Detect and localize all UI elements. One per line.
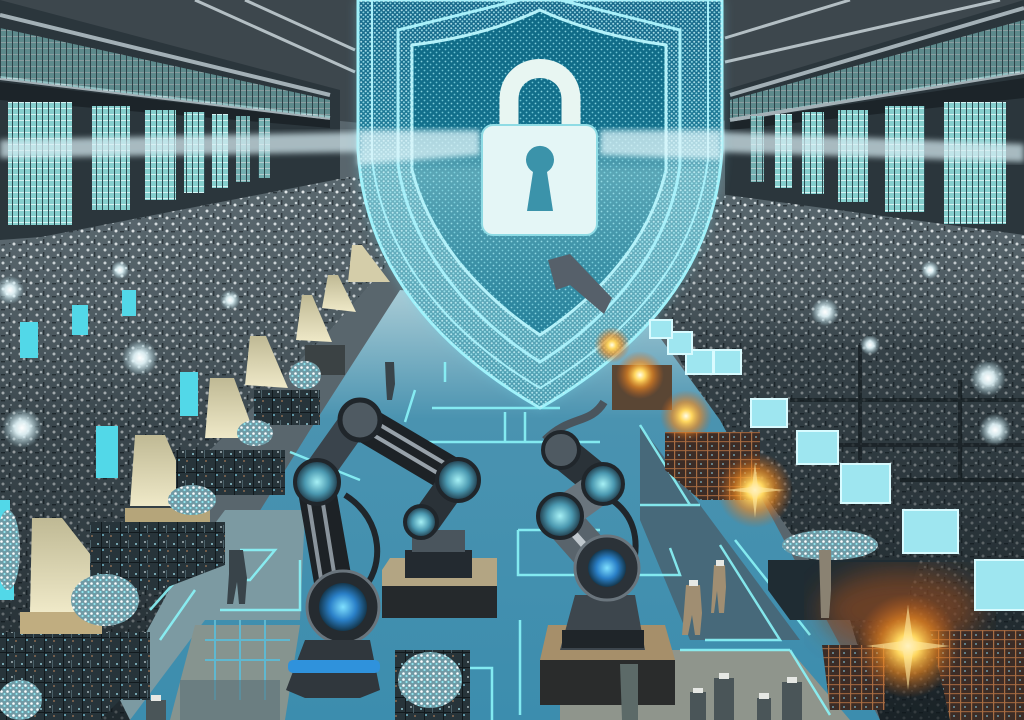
shield inner core — [412, 10, 666, 335]
light cone 1 — [30, 518, 112, 612]
ceiling — [0, 0, 1024, 140]
bottom sparkling machine — [395, 650, 470, 720]
floor left grey panel — [115, 510, 305, 720]
orange welding flares — [594, 327, 960, 698]
right robot column — [560, 518, 606, 570]
right machine field — [650, 190, 1024, 720]
worker 3 — [682, 585, 702, 635]
right robot hose — [612, 500, 636, 585]
floor circuit lines — [150, 362, 830, 720]
machine block 2 — [90, 522, 225, 590]
machine table large — [20, 612, 102, 634]
machine table 2 — [125, 508, 210, 522]
factory floor — [130, 290, 880, 720]
glow band across shield — [358, 130, 722, 165]
machine block large — [0, 632, 150, 720]
machine block 5 — [305, 345, 345, 375]
bottom right orange cart — [822, 645, 885, 710]
cyan screens left — [0, 290, 198, 600]
light cone 2 — [130, 435, 196, 506]
right robot platform — [540, 625, 675, 705]
bottom right machinery — [930, 630, 1024, 720]
left robot platform back — [382, 558, 497, 618]
right robot joints — [538, 432, 639, 600]
left robot joints — [295, 400, 479, 643]
shield outer layer — [358, 0, 722, 408]
shield core dots — [412, 10, 666, 335]
worker 6 — [620, 664, 638, 720]
right robot arm — [545, 402, 645, 650]
light cone 5 — [296, 295, 332, 342]
machine table 3 — [612, 365, 672, 410]
shield dotted layer — [358, 0, 722, 408]
shoulder — [320, 425, 352, 470]
security shield — [358, 0, 722, 408]
machine glitter top — [782, 530, 878, 560]
right wall with windows — [725, 0, 1024, 240]
worker 4 — [711, 565, 726, 613]
glitter clusters — [0, 361, 321, 720]
workers group — [146, 678, 802, 720]
orange glow right — [820, 570, 980, 650]
right robot base dome — [560, 595, 645, 650]
small overhead robot arm — [548, 254, 612, 314]
shield middle outline — [372, 0, 708, 388]
light cone 4 — [245, 336, 288, 388]
light cone 6 — [322, 275, 356, 312]
padlock shackle — [509, 68, 571, 130]
floor bottom left tan — [170, 625, 300, 720]
head base — [405, 550, 472, 578]
worker 5 — [819, 550, 831, 618]
floor right dark aisle — [640, 425, 800, 640]
padlock icon — [482, 68, 597, 235]
worker helmets — [151, 560, 797, 701]
base column — [316, 485, 338, 610]
padlock body — [482, 125, 597, 235]
monitors — [650, 320, 1024, 610]
left wall with windows — [0, 0, 340, 240]
machine block 4 — [254, 390, 320, 425]
worker 2 — [385, 362, 395, 400]
left robot arm — [306, 412, 472, 610]
left robot base — [286, 640, 380, 698]
machine table 1 — [768, 560, 920, 620]
shield glow — [358, 0, 722, 408]
worker 1 — [227, 550, 247, 604]
machine block 3 — [176, 450, 285, 495]
sparkle lights — [0, 261, 1011, 448]
light cone 3 — [205, 378, 256, 438]
fore arm — [425, 480, 455, 522]
workers — [146, 362, 831, 720]
keyhole — [526, 146, 554, 211]
horizontal glow band — [0, 132, 1024, 162]
left machine field — [0, 175, 400, 720]
left production line — [0, 245, 390, 720]
floor right tan area — [560, 650, 850, 720]
upper arm — [358, 420, 456, 478]
bottom left scaffold — [180, 620, 290, 720]
right robot wrist — [545, 402, 604, 440]
shield second outline — [398, 0, 680, 362]
right production line — [612, 320, 1024, 720]
hose — [345, 495, 377, 592]
machine table 2 — [665, 432, 760, 500]
light cone 7 — [348, 245, 390, 282]
